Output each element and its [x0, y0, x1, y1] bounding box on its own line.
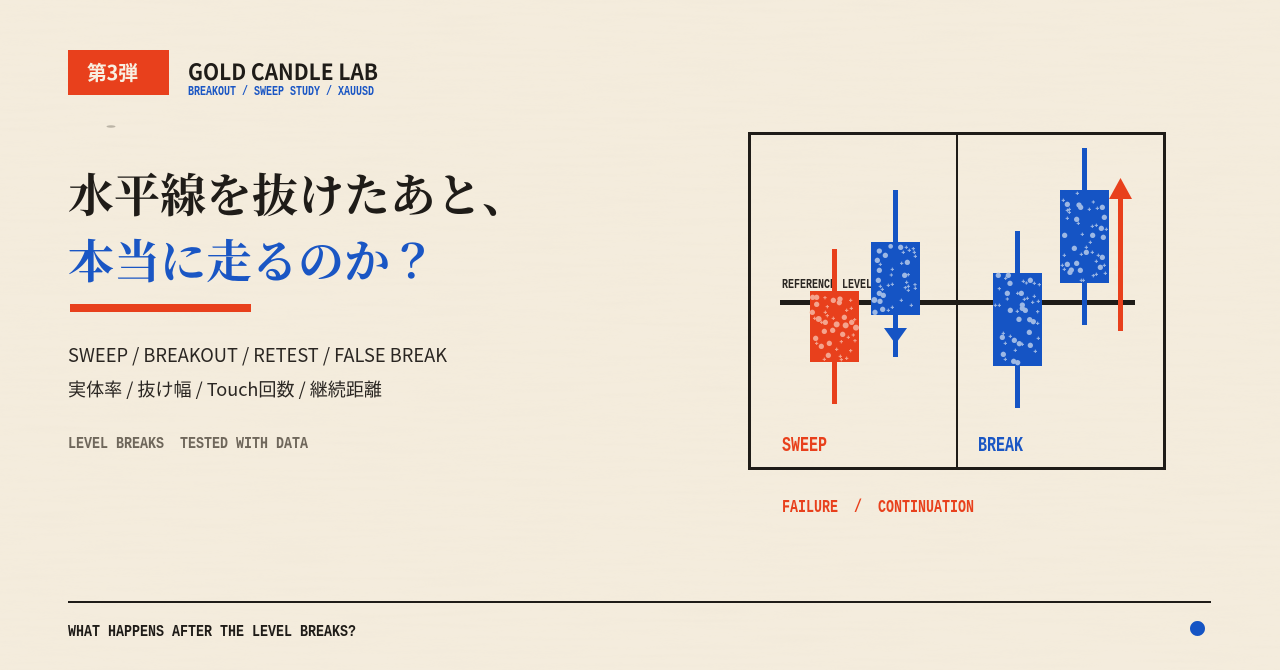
label: sweep: SWEEP: [782, 435, 827, 458]
title: [68, 160, 528, 292]
candle: blue break lower: [993, 231, 1042, 408]
outcome labels: FAILURE / CONTINUATION: [782, 498, 974, 518]
brand heading: GOLD CANDLE LAB: [188, 55, 378, 87]
footer rule: [68, 601, 1211, 603]
tagline: LEVEL BREAKS TESTED WITH DATA: [68, 435, 309, 454]
arrow: down: [884, 328, 907, 344]
reference level label: REFERENCE LEVEL: [782, 277, 872, 293]
footer text: WHAT HAPPENS AFTER THE LEVEL BREAKS?: [68, 623, 356, 642]
arrow: up: [1109, 178, 1132, 331]
subtitle: metrics: 実体率 / 抜け幅 / Touch回数 / 継続距離: [68, 376, 382, 402]
reference line: [780, 300, 1135, 305]
footer dot: [1190, 621, 1205, 636]
candle: blue sweep rejection: [871, 190, 920, 357]
title: 水平線を抜けたあと、: [68, 160, 528, 226]
title: 本当に走るのか？: [68, 226, 436, 292]
brand heading: BREAKOUT / SWEEP STUDY / XAUUSD: [188, 84, 374, 100]
brand heading: [188, 55, 378, 100]
panel divider: [956, 133, 958, 469]
candle: red sweep: [810, 249, 859, 404]
badge: 第3弾: 第3弾: [87, 57, 138, 86]
subtitle: terms: SWEEP / BREAKOUT / RETEST / FALSE BREAK: [68, 341, 448, 368]
label: break: BREAK: [978, 435, 1023, 458]
chart panel: [750, 133, 1164, 469]
chart frame: [750, 134, 1164, 468]
badge: 第3弾: [68, 50, 169, 95]
title underline: [70, 304, 251, 312]
candle: blue break upper: [1060, 148, 1109, 325]
